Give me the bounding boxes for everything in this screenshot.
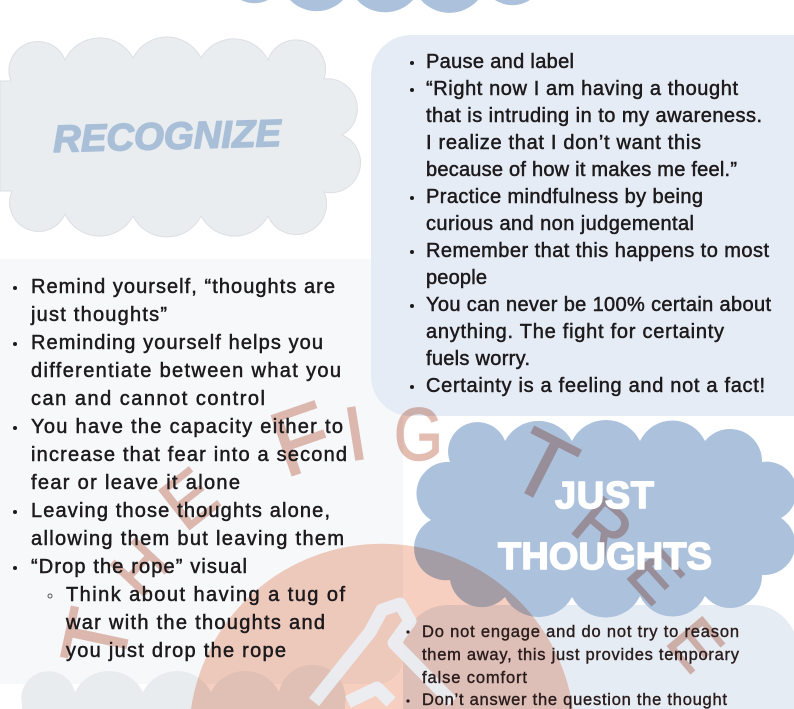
- mountain circle logo: [191, 544, 573, 709]
- watermark: THE FIG TREE: E: [146, 453, 233, 546]
- text block: pause and label: that is intruding in to my awareness.: [426, 105, 762, 127]
- text block: pause and label: anything. The fight for certainty: [426, 321, 724, 343]
- text block: pause and label: fuels worry.: [426, 348, 530, 370]
- text block: remind yourself: you just drop the rope: [66, 640, 286, 662]
- text block: do not engage: [406, 623, 740, 709]
- text block: remind yourself: differentiate between what you: [31, 360, 341, 382]
- watermark: THE FIG TREE: E: [614, 535, 698, 617]
- watermark: THE FIG TREE: R: [558, 482, 647, 574]
- text block: pause and label: Remember that this happens to most: [426, 240, 769, 262]
- panel: recognize text background: [0, 259, 403, 684]
- text block: remind yourself: allowing them but leaving them: [31, 528, 344, 550]
- heading: just thoughts: [498, 475, 712, 578]
- cloud: just thoughts: [414, 420, 794, 618]
- text block: remind yourself: can and cannot control: [31, 388, 265, 410]
- text block: pause and label: curious and non judgemental: [426, 213, 694, 235]
- text block: pause and label: because of how it makes me feel.”: [426, 159, 737, 181]
- text block: remind yourself: fear or leave it alone: [31, 472, 240, 494]
- watermark: THE FIG TREE: T: [43, 601, 152, 675]
- mountain logo lines: [314, 604, 452, 702]
- text block: pause and label: Practice mindfulness by being: [426, 186, 703, 208]
- text block: remind yourself: Think about having a tug of: [66, 584, 345, 606]
- watermark: THE FIG TREE: T: [495, 409, 591, 525]
- text block: do not engage: Do not engage and do not try to reason: [422, 623, 739, 641]
- panel: pause and label background: [371, 35, 794, 416]
- text block: pause and label: Pause and label: [426, 51, 574, 73]
- text block: remind yourself: war with the thoughts and: [65, 612, 325, 634]
- watermark: THE FIG TREE: H: [96, 524, 183, 610]
- heading: recognize: RECOGNIZE: [53, 113, 283, 161]
- text block: remind yourself: [13, 276, 347, 662]
- text block: pause and label: You can never be 100% certain about: [426, 294, 771, 316]
- text block: pause and label: people: [426, 267, 487, 289]
- heading: just thoughts: JUST: [555, 475, 654, 517]
- watermark: THE FIG TREE: G: [394, 393, 443, 476]
- cloud: recognize: [0, 37, 361, 237]
- text block: pause and label: “Right now I am having a thought: [426, 78, 738, 100]
- text block: remind yourself: Leaving those thoughts alone,: [31, 500, 330, 522]
- text block: do not engage: false comfort: [422, 669, 527, 687]
- watermark: THE FIG TREE: [43, 382, 738, 685]
- watermark: THE FIG TREE: E: [653, 603, 738, 685]
- text block: remind yourself: “Drop the rope” visual: [31, 556, 247, 578]
- text block: remind yourself: increase that fear into a second: [31, 444, 347, 466]
- watermark: THE FIG TREE: I: [338, 391, 373, 478]
- text block: remind yourself: Reminding yourself helps you: [31, 332, 323, 354]
- heading: just thoughts: THOUGHTS: [498, 536, 712, 578]
- text block: remind yourself: Remind yourself, “thoughts are: [31, 276, 335, 298]
- text block: do not engage: Don’t answer the question the thought: [422, 691, 727, 709]
- text block: pause and label: I realize that I don’t want this: [426, 132, 701, 154]
- top cloud edge: [241, 0, 530, 13]
- panel: do not engage background: [403, 605, 794, 709]
- text block: remind yourself: just thoughts”: [30, 304, 167, 326]
- text block: pause and label: [410, 51, 771, 397]
- text block: remind yourself: You have the capacity either to: [31, 416, 343, 438]
- watermark: THE FIG TREE: F: [258, 382, 345, 497]
- text block: do not engage: them away, this just provides temporary: [422, 646, 740, 664]
- cloud: bottom left: [21, 665, 346, 709]
- text block: pause and label: Certainty is a feeling and not a fact!: [426, 375, 765, 397]
